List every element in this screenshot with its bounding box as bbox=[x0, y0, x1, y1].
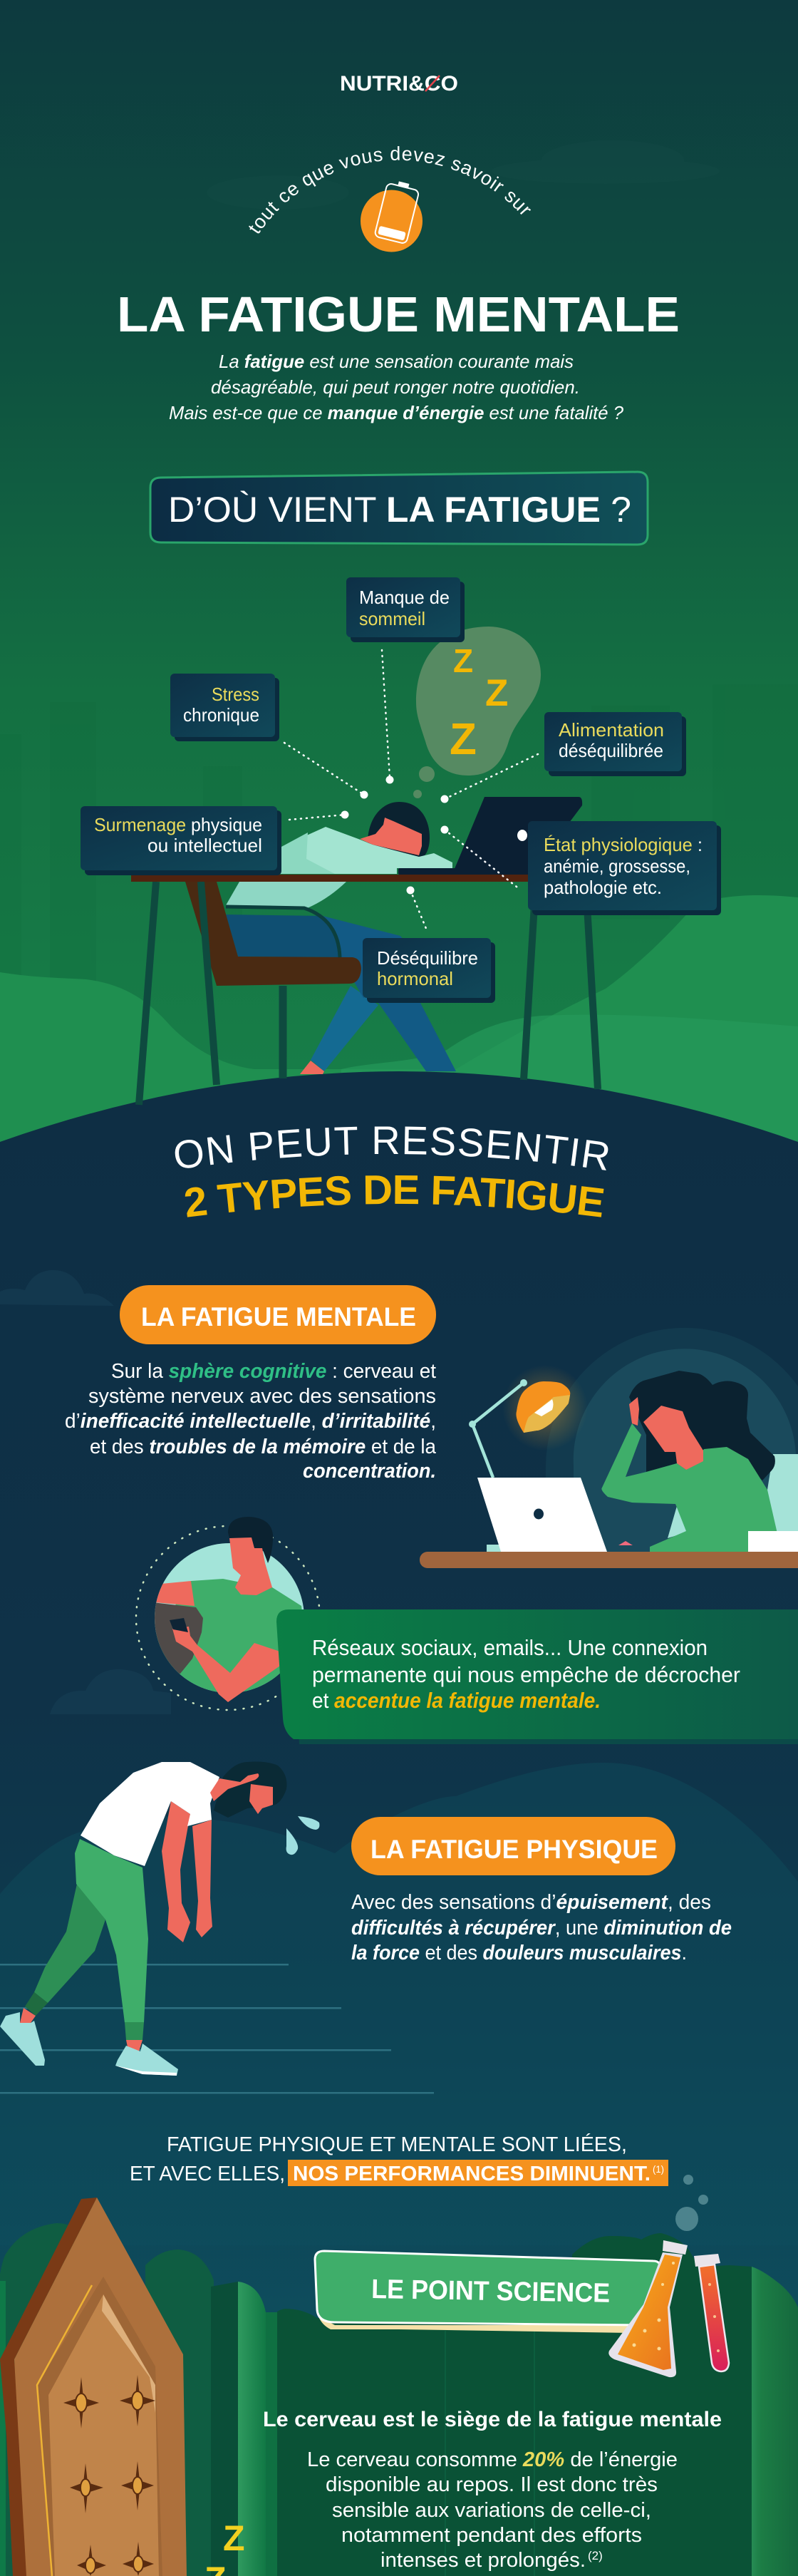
background clouds in dark section bbox=[0, 1270, 171, 1714]
section heading: 2 types de fatigue: 2 TYPES DE FATIGUE bbox=[185, 1175, 604, 1217]
background: teal hills behind physical section bbox=[0, 1763, 798, 2245]
track lines bbox=[0, 1964, 434, 2094]
outer wood bbox=[14, 2198, 187, 2576]
text: mental fatigue description bbox=[65, 1360, 437, 1483]
socks bbox=[20, 2008, 142, 2051]
laptop bbox=[477, 1478, 607, 1552]
strip bbox=[266, 2312, 277, 2576]
science text: disponible au repos. Il est donc très bbox=[326, 2473, 658, 2496]
face bbox=[643, 1406, 703, 1470]
chair front leg bbox=[201, 882, 217, 1085]
text: fatigue linked: FATIGUE PHYSIQUE ET MENTALE SONT LIÉES, bbox=[167, 2133, 627, 2156]
text: mental fatigue description: et des troubles de la mémoire et de la bbox=[90, 1436, 437, 1458]
label: alimentation: déséquilibrée bbox=[559, 740, 663, 761]
icon: low battery bbox=[361, 180, 423, 252]
chair arm bbox=[226, 907, 340, 957]
illustration: sleeping worker bbox=[131, 627, 598, 1105]
label: état physiologique: État physiologique : bbox=[544, 834, 703, 855]
hair bbox=[629, 1371, 775, 1480]
desk bbox=[131, 875, 559, 882]
intro text: Mais est-ce que ce manque d’énergie est une fatalité ? bbox=[169, 402, 624, 423]
intro text: La fatigue est une sensation courante mais bbox=[219, 351, 574, 372]
sleep letters bbox=[450, 642, 508, 764]
text: physical fatigue description bbox=[351, 1891, 732, 1964]
shirt bbox=[81, 1762, 219, 1866]
title: LA FATIGUE MENTALE bbox=[117, 287, 680, 342]
callout: constant connection: Réseaux sociaux, emails... Une connexion bbox=[312, 1635, 708, 1660]
dark rim bbox=[0, 2198, 97, 2576]
label: surmenage bbox=[81, 806, 281, 875]
sleep letters: Z bbox=[485, 672, 508, 714]
heading box: d'où vient la fatigue bbox=[150, 472, 648, 545]
science text: Le cerveau consomme 20% de l’énergie bbox=[307, 2448, 678, 2471]
label: alimentation bbox=[544, 712, 686, 776]
label: état physiologique bbox=[528, 821, 721, 915]
sweat drops bbox=[286, 1816, 319, 1855]
sleep letters: Z bbox=[453, 642, 473, 679]
background: faint city towers bbox=[0, 684, 798, 991]
hair bbox=[214, 1762, 286, 1818]
text: mental fatigue description: d’inefficacité intellectuelle, d’irritabilité, bbox=[65, 1410, 436, 1433]
back cuff bbox=[25, 1992, 48, 2016]
torso bbox=[226, 882, 346, 909]
label: déséquilibre hormonal: Déséquilibre bbox=[377, 947, 478, 969]
sweater bbox=[601, 1423, 779, 1552]
label: état physiologique: anémie, grossesse, bbox=[544, 855, 690, 877]
pants on seat bbox=[226, 915, 340, 957]
main panel bbox=[277, 2309, 752, 2576]
chair bbox=[185, 882, 361, 986]
label: stress chronique bbox=[170, 674, 279, 741]
door highlight bbox=[102, 2294, 155, 2413]
text: mental fatigue description: système nerveux avec des sensations bbox=[88, 1385, 436, 1408]
mouse bbox=[618, 1541, 633, 1545]
papers bbox=[748, 1531, 798, 1552]
bubbles bbox=[675, 2175, 708, 2231]
thought bubble bbox=[413, 627, 541, 798]
icon: test tube bbox=[694, 2254, 729, 2371]
label: stress chronique: chronique bbox=[183, 704, 259, 726]
desk bbox=[420, 1552, 798, 1568]
highlight: performances: NOS PERFORMANCES DIMINUENT. bbox=[293, 2163, 651, 2185]
text: fatigue linked: ET AVEC ELLES, bbox=[130, 2163, 285, 2185]
label: surmenage: ou intellectuel bbox=[147, 835, 262, 856]
back leg bbox=[34, 1884, 105, 2003]
label: état physiologique: pathologie etc. bbox=[544, 877, 662, 898]
tree bumps behind sign bbox=[572, 2233, 752, 2324]
pill: la fatigue physique bbox=[351, 1817, 675, 1875]
background: dark section bbox=[0, 1071, 798, 2576]
right arm bbox=[192, 1820, 212, 1937]
shoes bbox=[0, 2012, 178, 2076]
laptop bbox=[398, 797, 582, 875]
dark strip bbox=[211, 2282, 238, 2576]
sleep letters near monolith: Z bbox=[223, 2518, 245, 2558]
science text bbox=[307, 2448, 678, 2572]
chair back bbox=[668, 1454, 798, 1552]
chair center leg bbox=[279, 986, 286, 1078]
text: physical fatigue description: la force et des douleurs musculaires. bbox=[351, 1942, 687, 1964]
icon: flask bbox=[608, 2240, 688, 2377]
label: manque de sommeil: sommeil bbox=[359, 608, 425, 629]
text: physical fatigue description: difficultés à récupérer, une diminution de bbox=[351, 1917, 732, 1939]
sleep letters near monolith bbox=[204, 2518, 245, 2576]
science text: sensible aux variations de celle-ci, bbox=[332, 2499, 651, 2522]
face bbox=[360, 818, 422, 855]
text: mental fatigue description: concentration. bbox=[303, 1460, 436, 1483]
face bbox=[249, 1784, 273, 1814]
text: fatigue linked bbox=[130, 2133, 668, 2186]
text: mental fatigue description: Sur la sphère cognitive : cerveau et bbox=[111, 1360, 436, 1383]
dotted connectors bbox=[284, 650, 538, 930]
label: alimentation: Alimentation bbox=[559, 719, 664, 741]
pants bbox=[75, 1839, 148, 2023]
left tree bbox=[0, 2223, 142, 2576]
left arm bbox=[162, 1801, 190, 1942]
sign: le point science: LE POINT SCIENCE bbox=[371, 2274, 611, 2309]
label: déséquilibre hormonal bbox=[363, 938, 495, 1003]
halo bbox=[546, 1328, 798, 1552]
front cuff bbox=[125, 2022, 144, 2040]
lamp bbox=[469, 1365, 588, 1478]
label: manque de sommeil: Manque de bbox=[359, 587, 450, 608]
hand bbox=[629, 1397, 639, 1426]
second tree bbox=[145, 2250, 214, 2576]
curved subtitle: tout ce que vous devez savoir sur bbox=[249, 146, 531, 234]
pill: la fatigue mentale bbox=[120, 1285, 436, 1344]
rear and side desk legs bbox=[139, 882, 598, 1105]
illustration: woman at laptop with lamp bbox=[420, 1328, 798, 1568]
label: stress chronique: Stress bbox=[212, 684, 259, 705]
shoulder bbox=[279, 827, 452, 874]
illustration: exhausted runner bbox=[0, 1762, 319, 2076]
background: light hills bbox=[0, 895, 798, 1155]
background: green hero bbox=[0, 0, 798, 1155]
highlight: performances: (1) bbox=[653, 2163, 664, 2175]
background: faint clouds bbox=[207, 140, 720, 210]
illustration: wooden monolith bbox=[0, 2198, 187, 2576]
science text: intenses et prolongés. bbox=[380, 2549, 586, 2572]
shoulder shade bbox=[279, 833, 335, 874]
section heading: on peut ressentir: ON PEUT RESSENTIR bbox=[175, 1126, 608, 1170]
pill: la fatigue mentale: LA FATIGUE MENTALE bbox=[141, 1302, 416, 1331]
sign: le point science bbox=[315, 2251, 660, 2333]
background: lighter foreground hill bbox=[341, 1015, 798, 1155]
text: physical fatigue description: Avec des sensations d’épuisement, des bbox=[351, 1891, 711, 1914]
callout: constant connection bbox=[276, 1609, 798, 1744]
frame band bbox=[37, 2277, 162, 2576]
label: surmenage: Surmenage physique bbox=[94, 814, 262, 835]
label: déséquilibre hormonal: hormonal bbox=[377, 968, 453, 989]
heading box: d'où vient la fatigue: D’OÙ VIENT LA FATIGUE ? bbox=[168, 490, 631, 530]
studs bbox=[63, 2375, 155, 2576]
thigh bbox=[323, 916, 428, 998]
shins and foot bbox=[300, 986, 456, 1074]
right trunk bbox=[752, 2267, 798, 2576]
callout: constant connection: et accentue la fatigue mentale. bbox=[312, 1688, 601, 1713]
science text: notamment pendant des efforts bbox=[341, 2524, 642, 2547]
neck and ear bbox=[210, 1773, 259, 1801]
logo: NUTRI&CO bbox=[340, 72, 458, 96]
inner door bbox=[48, 2294, 159, 2576]
illustration: man with phone in circle bbox=[136, 1517, 320, 1711]
background: forest bbox=[0, 2223, 798, 2576]
intro text bbox=[169, 351, 624, 423]
callout: constant connection: permanente qui nous empêche de décrocher bbox=[312, 1662, 740, 1687]
gold line bbox=[37, 2285, 92, 2576]
science text: (2) bbox=[588, 2549, 603, 2562]
science heading: Le cerveau est le siège de la fatigue mentale bbox=[263, 2408, 722, 2431]
connector dots bbox=[341, 776, 449, 894]
hair bbox=[368, 802, 430, 858]
light trunk bbox=[238, 2282, 266, 2576]
intro text: désagréable, qui peut ronger notre quotidien. bbox=[211, 376, 580, 398]
sleep letters: Z bbox=[450, 715, 477, 764]
label: manque de sommeil bbox=[346, 577, 465, 642]
pill: la fatigue physique: LA FATIGUE PHYSIQUE bbox=[370, 1835, 658, 1864]
